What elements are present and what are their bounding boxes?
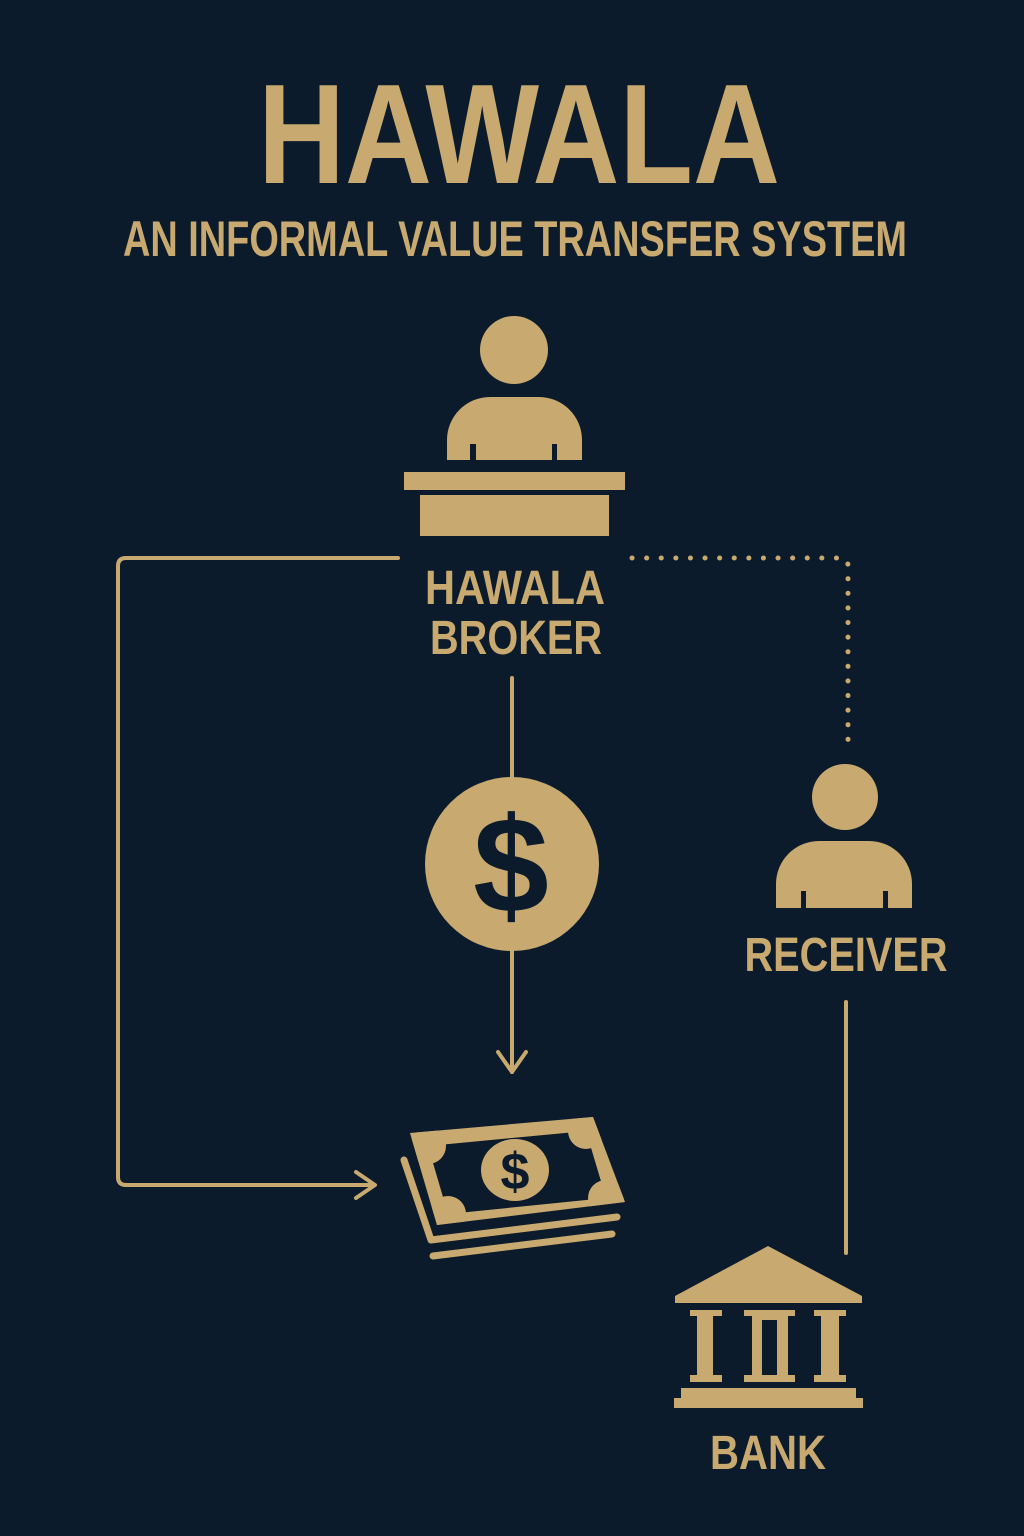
line: receiver to bank: [844, 1002, 848, 1253]
icon: hawala broker at desk: [404, 316, 625, 536]
label: bank: BANK: [710, 1427, 826, 1480]
label: receiver: RECEIVER: [744, 929, 948, 982]
icon: cash stack: [404, 1113, 625, 1256]
title: HAWALA: [258, 55, 780, 214]
icon: dollar coin: [425, 777, 599, 951]
icon: dollar coin: $: [473, 789, 549, 941]
label: hawala broker: HAWALA: [425, 562, 605, 615]
icon: receiver: [776, 764, 912, 908]
icon: cash stack: $: [501, 1143, 530, 1201]
icon: bank: [674, 1246, 863, 1408]
label: hawala broker: [425, 562, 605, 665]
arrow: broker to cash (left loop): [118, 558, 398, 1198]
arrow: dotted broker to receiver: [632, 558, 848, 742]
arrow: broker to coin to cash: [498, 678, 526, 1072]
label: hawala broker: BROKER: [430, 612, 602, 665]
